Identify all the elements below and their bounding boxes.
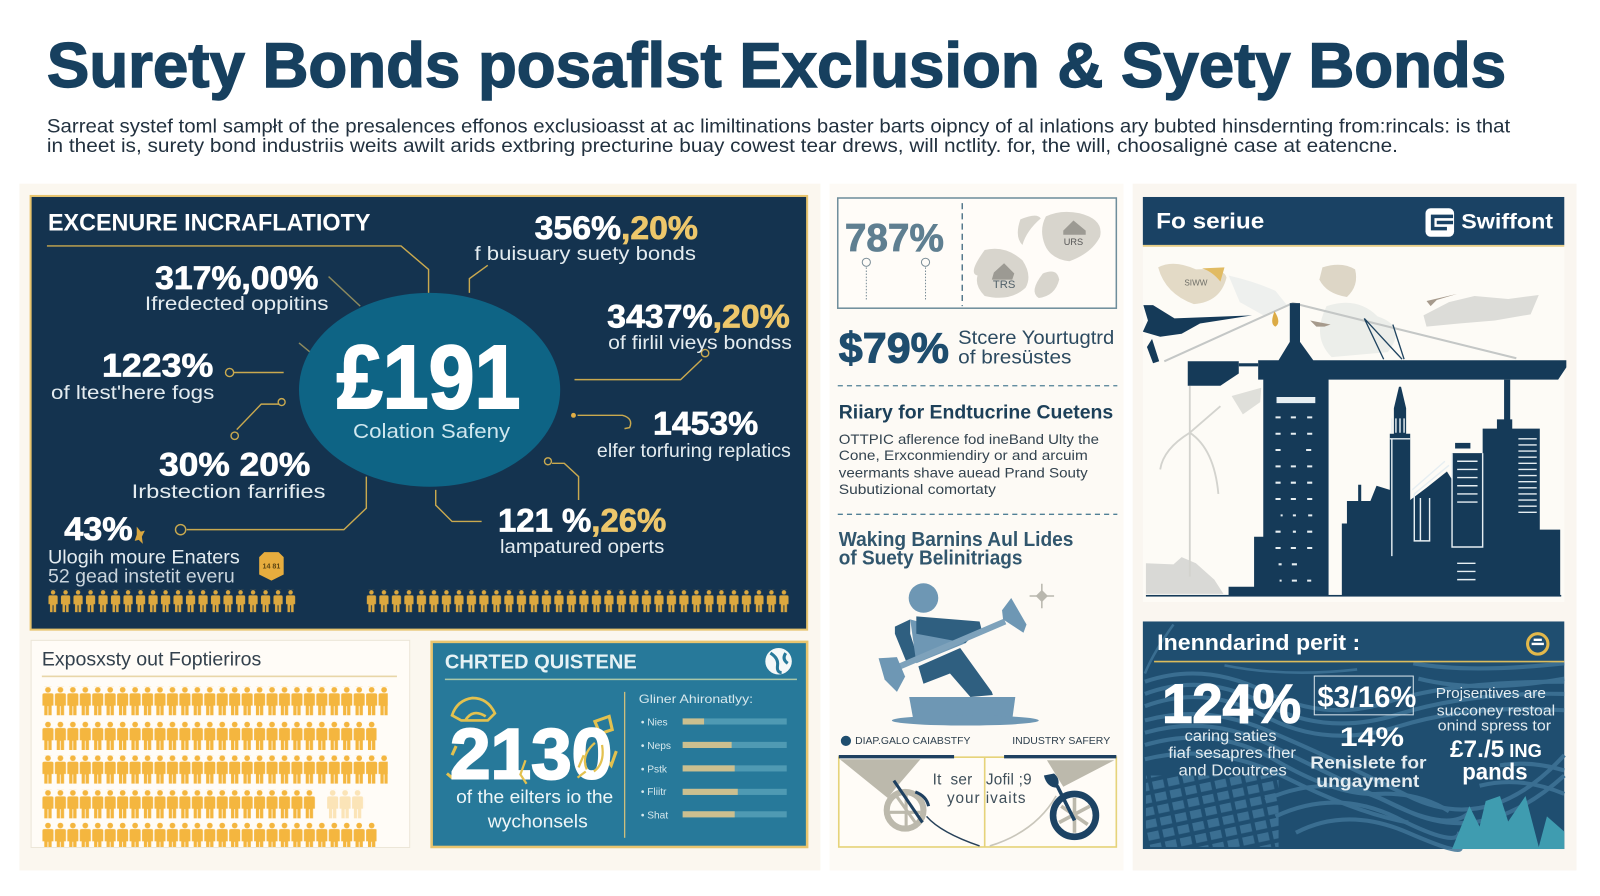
stat: 3437%,20%: 3437%,20%	[607, 298, 790, 335]
text block: endtucrine: OTTPIC aflerence fod ineBand Ulty the	[839, 432, 1099, 448]
icon: jet	[1143, 305, 1252, 363]
stat: 43%: Ulogih moure Enaters	[48, 546, 240, 568]
stat: 356%,20%: 356%,20%	[535, 209, 698, 246]
stat: 1453%	[597, 405, 791, 462]
background map fragments: SIWW	[1184, 279, 1208, 288]
heading: CHRTED QUISTENE	[445, 651, 637, 673]
stat: 124%	[1162, 672, 1301, 780]
icon: right wheel	[990, 774, 1096, 846]
map regions: TRS	[993, 279, 1015, 291]
stat: 124%: and Dcoutrces	[1179, 763, 1287, 780]
stat: 43%: 52 gead instetit everu	[48, 566, 235, 588]
stat: 30% 20%: 30% 20%	[159, 446, 310, 483]
wheel caption	[933, 772, 1032, 807]
icon: globe	[765, 648, 792, 675]
title: Surety Bonds posaflst Exclusion & Syety Bonds	[47, 31, 1506, 101]
logo	[1426, 208, 1553, 237]
map regions	[974, 212, 1101, 298]
legend: DIAP.GALO CAIABSTFY	[855, 736, 971, 747]
text block: endtucrine	[839, 401, 1113, 498]
stat: 356%,20%: f buisuary suety bonds	[474, 243, 696, 265]
wheel caption: your ivaits	[947, 790, 1026, 807]
stat: 121%,26%	[498, 502, 666, 558]
stat: $79%: $79%	[839, 324, 949, 372]
stat: $3/16%: 14%	[1340, 722, 1404, 752]
big number 2130: 2130	[450, 715, 612, 795]
stat: 124%: caring saties	[1185, 728, 1277, 745]
panel: skyline	[1143, 197, 1566, 602]
stat: 30% 20%: Irbstection farrifies	[132, 481, 326, 503]
intro text	[47, 116, 1511, 157]
stat: 1453%: elfer torfuring replatics	[597, 440, 791, 462]
panel: inenndarind perit	[1143, 621, 1564, 850]
text block: endtucrine: veermants shave auead Prand Souty	[839, 466, 1089, 482]
panel: map stat box	[838, 198, 1116, 308]
pin markers	[862, 258, 930, 301]
panel: wheel illustration	[839, 757, 1116, 847]
panel: charted quistene	[432, 642, 807, 847]
icon: left wheel	[887, 781, 980, 846]
stat: 3437%,20%	[607, 298, 792, 354]
caption: of the eilters io the	[456, 786, 613, 807]
icon: figure with hammer	[879, 583, 1054, 726]
background map fragments	[1146, 264, 1539, 594]
building details	[1276, 400, 1537, 581]
center figure circle: £191	[337, 328, 520, 428]
bar chart: • Neps	[641, 741, 671, 752]
stat: $3/16%: Renislete for	[1310, 752, 1427, 772]
center figure circle: Colation Safeny	[353, 421, 511, 443]
stat: 1223%: of ltest'here fogs	[51, 382, 214, 404]
stat: projsentives: £7./5 ING	[1450, 736, 1542, 763]
stat 787%: 787%	[845, 217, 944, 260]
stat: $79%: Stcere Yourtugtrd	[958, 327, 1114, 349]
stat: 30% 20%	[132, 446, 326, 503]
icon: gold badge	[259, 552, 284, 581]
heading: waking barnins: of Suety Belinitriags	[839, 547, 1022, 569]
stat: 121%,26%: 121 %,26%	[498, 502, 666, 539]
bar chart: • Shat	[641, 810, 668, 821]
legend	[841, 736, 1110, 747]
people row right	[365, 590, 790, 612]
stat: projsentives: Projsentives are	[1436, 686, 1546, 702]
heading: waking barnins	[839, 529, 1073, 569]
icon: gold badge: 14 81	[263, 562, 280, 570]
stat: 43%: 43%	[64, 510, 133, 547]
stat: 121%,26%: lampatured operts	[500, 536, 664, 558]
bar chart: • Nies	[641, 718, 668, 729]
connector lines	[47, 246, 709, 535]
center figure circle	[299, 293, 560, 487]
people rows	[42, 687, 388, 847]
stat: $79%	[839, 324, 1114, 372]
legend: INDUSTRY SAFERY	[1012, 736, 1110, 747]
stat: projsentives: onind spress tor	[1438, 719, 1551, 735]
heading: waking barnins: Waking Barnins Aul Lides	[839, 529, 1073, 551]
stat: $3/16%	[1310, 676, 1427, 791]
caption	[456, 786, 613, 832]
heading: Inenndarind perit :	[1157, 630, 1360, 655]
teal peaks	[1452, 796, 1564, 849]
stat: $3/16%: $3/16%	[1317, 681, 1416, 714]
text block: endtucrine: Riiary for Endtucrine Cuetens	[839, 401, 1113, 423]
column backgrounds	[19, 184, 1577, 870]
stat: 1223%: 1223%	[102, 347, 213, 384]
map regions: URS	[1064, 237, 1083, 247]
bar chart: • Fliitr	[641, 787, 667, 798]
panel: exposure people chart	[31, 640, 410, 847]
stat: 317%,00%: 317%,00%	[155, 259, 318, 296]
intro text: in theet is, surety bond industriis weits awilt arids extbring precturine buay cowest tear drews, will nctlity. for, the will, choosalignė case at eatencne.	[47, 135, 1398, 157]
caption: wychonsels	[487, 811, 588, 832]
stat: 317%,00%	[145, 259, 329, 315]
stat: projsentives: succoney restoal	[1437, 703, 1555, 719]
text block: endtucrine: Cone, Erxconmiendiry or and arcuim	[839, 448, 1088, 464]
panel heading: EXCENURE INCRAFLATIOTY	[48, 210, 370, 237]
stat: $3/16%: ungayment	[1316, 771, 1420, 791]
wave texture	[1145, 625, 1564, 850]
header bar: Fo seriue	[1156, 209, 1264, 234]
stat: 43%	[48, 510, 240, 588]
stat: 1453%: 1453%	[653, 405, 758, 442]
stat: projsentives: pands	[1462, 759, 1528, 785]
text block: endtucrine: Subutizional comortaty	[839, 482, 997, 498]
bar chart: Gliner Ahironatlyy:	[639, 692, 753, 706]
stat: projsentives	[1436, 686, 1555, 785]
bar chart: • Pstk	[641, 764, 668, 775]
stat: 317%,00%: Ifredected oppitins	[145, 293, 329, 315]
stat: 1223%	[51, 347, 214, 404]
people row left	[47, 590, 296, 612]
logo: Swiffont	[1461, 210, 1553, 234]
stat: 124%: fiaf sesapres fher	[1168, 745, 1296, 762]
header bar	[1143, 197, 1564, 247]
grid texture	[1146, 776, 1279, 847]
stat: 3437%,20%: of firlil vieys bondss	[608, 332, 792, 354]
stat: 124%: 124%	[1162, 672, 1301, 734]
stat: 356%,20%	[474, 209, 698, 265]
wheel caption: It ser Jofil ;9	[933, 772, 1032, 789]
skyline silhouette	[1188, 303, 1566, 595]
chart heading: Exposxsty out Foptieriros	[42, 648, 261, 670]
stat: $79%: of bresüstes	[958, 346, 1071, 368]
icon: gold ring	[1528, 634, 1548, 654]
panel: exposure statistics	[31, 196, 807, 630]
intro text: Sarreat systef toml sampłt of the presalences effonos exclusioasst at ac limiltinations baster barts oipncy of al inlations ary bubted hinsdernting from:rincals: is that	[47, 116, 1511, 138]
bar chart	[639, 692, 787, 821]
